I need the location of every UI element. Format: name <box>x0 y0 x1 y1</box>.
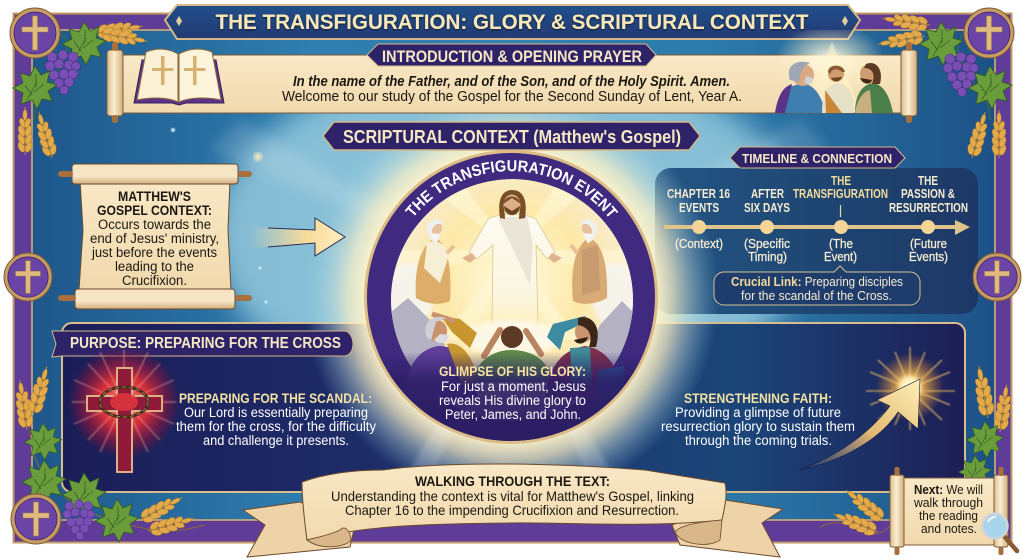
text: preparing for the scandal: them for the cross, for the difficulty <box>176 419 376 434</box>
figure: left prophet <box>416 219 454 304</box>
text: opening prayer: Welcome to our study of the Gospel for the Second Sunday of Lent, Year A. <box>282 89 742 105</box>
text: glimpse of his glory <box>439 364 586 422</box>
text: Matthew's context: just before the events <box>91 245 217 260</box>
figure: right prophet <box>571 219 607 304</box>
banner: walking through the text <box>243 464 783 557</box>
central glow <box>303 89 719 505</box>
center disciple <box>472 350 553 382</box>
figure: Jesus <box>462 190 562 325</box>
icon: open book <box>134 49 224 105</box>
text: opening prayer <box>282 74 742 105</box>
icon: corner medallion top right <box>964 8 1014 58</box>
chart: timeline <box>664 174 970 264</box>
callout: crucial link <box>714 266 920 305</box>
text: walking through the text: WALKING THROUGH THE TEXT: <box>415 473 610 489</box>
text: Matthew's context <box>90 189 219 288</box>
chart: timeline: PASSION & <box>901 187 955 201</box>
heading: introduction: INTRODUCTION & OPENING PRAYER <box>382 48 642 66</box>
text: strengthening faith: resurrection glory to sustain them <box>661 419 855 434</box>
icon: cross with crown of thorns <box>68 346 180 472</box>
decoration: bottom-right vine <box>820 364 1015 540</box>
heading: timeline: TIMELINE & CONNECTION <box>742 151 892 166</box>
chart: timeline: CHAPTER 16 <box>667 187 730 201</box>
chart: timeline: AFTER <box>751 187 784 201</box>
chart: timeline: RESURRECTION <box>889 201 968 215</box>
text: strengthening faith: Providing a glimpse of future <box>675 405 841 420</box>
chart: timeline: (The <box>829 236 853 251</box>
chart: timeline: EVENTS <box>679 201 719 215</box>
decoration: top-right vine <box>876 10 1012 160</box>
heading: timeline <box>730 147 905 168</box>
text: next <box>913 483 983 536</box>
decoration: bottom-left vine <box>11 364 205 542</box>
panel: next scroll <box>890 467 1008 555</box>
text: glimpse of his glory: GLIMPSE OF HIS GLORY: <box>439 364 586 379</box>
text: strengthening faith: STRENGTHENING FAITH: <box>684 391 832 406</box>
panel: introduction scroll <box>107 42 901 123</box>
heading: scriptural context <box>323 122 700 150</box>
icon: side medallion right <box>973 253 1021 301</box>
left disciple <box>404 346 478 400</box>
arrow: to central event <box>250 218 345 256</box>
text: walking through the text: Chapter 16 to the impending Crucifixion and Resurrection. <box>345 502 679 518</box>
text: strengthening faith <box>661 391 855 448</box>
text: next: the reading <box>919 509 978 523</box>
text: Matthew's context: Crucifixion. <box>122 273 187 288</box>
text: walking through the text <box>331 473 694 518</box>
chart: timeline: Event) <box>824 249 857 264</box>
icon: scroll top roll <box>58 164 252 184</box>
text: glimpse of his glory: For just a moment, Jesus <box>441 379 586 394</box>
icon: corner medallion top left <box>10 8 60 58</box>
chart: timeline: (Context) <box>675 236 723 251</box>
callout: crucial link: for the scandal of the Cross. <box>741 289 892 303</box>
text: walking through the text: Understanding the context is vital for Matthew's Gospel, linking <box>331 488 694 504</box>
chart: timeline: THE <box>831 174 851 188</box>
chart: timeline: (Specific <box>744 236 790 251</box>
title banner <box>165 5 860 39</box>
text: glimpse of his glory: reveals His divine glory to <box>439 393 586 408</box>
text: Matthew's context: end of Jesus' ministry, <box>90 231 219 246</box>
text: glimpse of his glory: Peter, James, and John. <box>445 407 581 422</box>
text: next: Next: We will <box>914 483 983 497</box>
text: Matthew's context: GOSPEL CONTEXT: <box>97 203 212 218</box>
heading: scriptural context: SCRIPTURAL CONTEXT (Matthew's Gospel) <box>343 127 681 147</box>
icon: left roller <box>107 42 123 123</box>
chart: timeline: THE <box>918 174 938 188</box>
decoration: top-left vine <box>13 18 149 160</box>
panel: purpose <box>62 323 965 492</box>
circle: the Transfiguration event <box>364 150 658 444</box>
icon: side medallion left <box>4 253 52 301</box>
mountains <box>392 298 632 366</box>
right disciple <box>545 346 623 400</box>
text: Matthew's context: MATTHEW'S <box>118 189 191 204</box>
text: strengthening faith: through the coming trials. <box>685 433 832 448</box>
text: next: and notes. <box>921 522 977 536</box>
callout: crucial link: Crucial Link: Preparing disciples <box>731 275 903 289</box>
text: Matthew's context: Occurs towards the <box>98 217 211 232</box>
text: opening prayer: In the name of the Father, and of the Son, and of the Holy Spirit. Amen. <box>293 74 730 90</box>
panel: timeline background <box>655 168 978 314</box>
illustration: three disciples in light <box>775 24 893 113</box>
chart: timeline: TRANSFIGURATION <box>793 187 888 201</box>
chart: timeline: (Future <box>910 236 947 251</box>
text: next: walk through <box>913 496 983 510</box>
heading: purpose banner: PURPOSE: PREPARING FOR THE CROSS <box>70 335 341 352</box>
text: preparing for the scandal: Our Lord is essentially preparing <box>184 405 368 420</box>
icon: magnifying glass <box>982 514 1017 551</box>
panel: Matthew's Gospel context scroll <box>58 164 252 309</box>
figure: three disciples shielding eyes <box>380 312 642 441</box>
illustration: glory scene <box>386 179 639 421</box>
icon: rising arrow with star burst <box>799 347 955 470</box>
icon: corner medallion bottom left <box>11 494 61 544</box>
text: preparing for the scandal: PREPARING FOR THE SCANDAL: <box>179 391 372 406</box>
heading: purpose banner <box>52 331 353 357</box>
text: Matthew's context: leading to the <box>115 259 194 274</box>
text: preparing for the scandal <box>176 391 376 448</box>
chart: timeline: Events) <box>909 249 948 264</box>
title banner: THE TRANSFIGURATION: GLORY & SCRIPTURAL CONTEXT <box>216 10 808 34</box>
text: the transfiguration event arc: THE TRANSFIGURATION EVENT <box>404 160 618 217</box>
chart: timeline: SIX DAYS <box>744 201 790 215</box>
icon: right roller <box>901 42 917 123</box>
text: preparing for the scandal: and challenge it presents. <box>203 433 349 448</box>
chart: timeline: Timing) <box>748 249 787 264</box>
icon: scroll bottom roll <box>58 289 252 309</box>
